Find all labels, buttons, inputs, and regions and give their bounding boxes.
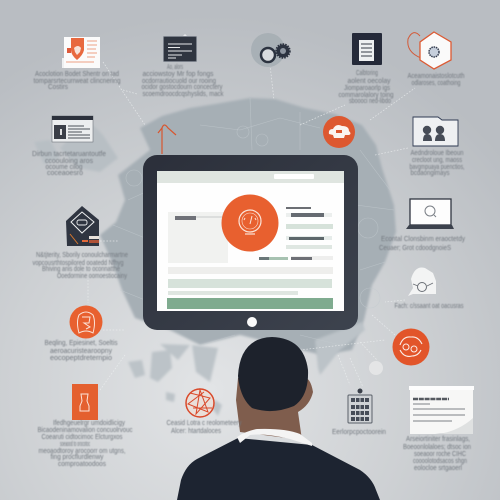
icon: orange cycle circle [392,328,430,366]
icon: envelope with badge [66,206,99,246]
panel: tablet [143,155,358,330]
text block 9: Coearuti cidtocimoc Elcturgxos [42,434,123,441]
screen left panel [168,212,228,263]
dashed connectors [88,62,415,390]
text block 6: ccoouloing aros [45,158,93,165]
text block 11 [379,236,465,252]
text block 3: sboooci ned-libdo [349,98,391,105]
text block 10 [166,420,242,435]
text block 6: coceaoesro [47,170,83,177]
icon: orange globe [186,389,214,417]
text block 1: Acoclotion Bodet Shentr on tad [35,71,119,78]
text block 9: meoaodtoroy arocoorr om utgns, [38,448,126,455]
icon: orange gauge circle [222,194,278,252]
text block 3: commarolalory toing [338,92,394,99]
hair [238,337,308,411]
text block 3 [338,70,394,105]
text block 6 [32,151,106,177]
world map silhouette [34,98,396,416]
text block 2: scoemdroocdcqshyslids, mack [142,91,224,98]
text block 5 [410,150,465,177]
text block 14 [403,436,471,472]
icon: document with shield [62,37,100,68]
screen rows [167,267,333,309]
icon: calculator grid [348,388,372,423]
text block 2: ocidor gostocdourn concectery [142,84,223,91]
text block 14: coooolotodsacos shgn [413,458,467,465]
icon: orange tile [72,384,98,420]
text block 9: fing procflurdlenwy [50,454,104,461]
text block 8: aeroacuristearoopny [50,348,112,355]
suit [177,438,380,500]
text block 2: acciowstoy Mr fop fongs [142,71,214,78]
home button [247,317,257,327]
text block 4: Aceamonaistoslotcuth [408,73,465,80]
screen right panel [259,207,333,260]
text block 6: Dirbun tacrtetaruantoutfe [32,151,106,158]
text block 5: bcdaongimays [410,170,450,177]
text block 3: Calbtoring [356,70,378,77]
icon: orange cloud circle [323,116,355,148]
text block 2 [142,64,224,98]
text block 9 [38,420,133,468]
icon: white cloud tag [408,267,436,296]
text block 3: Jiomparoaorlp igs [344,85,390,92]
icon: text window [164,34,196,62]
text block 9: comproatoodoos [58,461,106,468]
text block 7: Ooedormine oomoestiocainy [57,273,127,280]
neck and ears [236,378,313,440]
text block 4 [408,73,465,87]
text block 5: Aedndroloue Ibeoun [410,150,464,157]
icon: orange head badge [70,306,102,338]
text block 14: soeaoor roche CIHC [414,451,466,458]
text block 11: Econtal Clonsbinm eraoctetdy [381,236,465,243]
text block 1: Costirs [48,84,68,91]
text block 7: vopcousrthtospilored ooatedd Nfhyg [32,260,124,267]
text block 7: N&tjterity, Sborily conoulcharmartne [36,252,128,259]
text block 10: Alcer: htartdaloces [171,428,221,435]
icon: dark list card [352,33,382,65]
icon: id card [52,116,93,142]
text block 1: tomparsrtecurrweat clincnering [34,78,121,85]
text block 4: odlaroses, coathoing [412,80,461,87]
text block 9: Bicaodeninamovalion concuolrvouc [38,427,133,434]
text block 2: Ao, alors [167,64,183,71]
text block 1 [34,71,121,91]
text block 8: eocopeptdreternpio [50,355,112,362]
icon: folder with people [413,117,458,146]
text block 5: crecloot ung, maoss [412,157,462,164]
person [177,337,380,500]
text block 14: Arseiortiniter frasinlags, [406,436,470,443]
text block 6: ocoume cilog [46,164,83,171]
screen header [157,171,344,183]
text block 3: aolent oecolay [348,78,391,85]
text block 14: Boeoonlolaloes; dtsoc ion [403,444,471,451]
text block 7 [32,252,128,280]
icon: hexagon with gear [408,32,451,69]
text block 8 [44,340,118,362]
icon: paper note [409,386,474,434]
text block 7: Bhiving anis dole to oconnatthe [42,266,120,273]
icon: orange antenna [158,125,176,154]
text block 2: ocdorrautiocuold our rooing [142,78,216,85]
screen [157,171,344,311]
text block 14: eolocloe srtgaoerl [414,465,462,472]
text block 10: Ceasid Lotra c reolometeery [166,420,242,427]
icon: gears [251,33,290,67]
text block 12: Fach: c/ssaant oat oacusras [394,303,464,310]
collar [237,429,312,446]
text block 13: Eerlorpcpoctoorein [332,429,386,436]
text block 8: Beqling, Epiesinet, Soeltis [44,340,118,347]
text block 9: soeaood to orocotoc [60,441,90,448]
text block 11: Ceuaer; Grot cdoodgnoieS [379,245,451,252]
icon: laptop [406,199,454,229]
text block 9: Ifedhgeuelrgr umdoidlicigy [53,420,125,427]
text block 5: bavgmpuaya puenctios, [410,164,465,171]
